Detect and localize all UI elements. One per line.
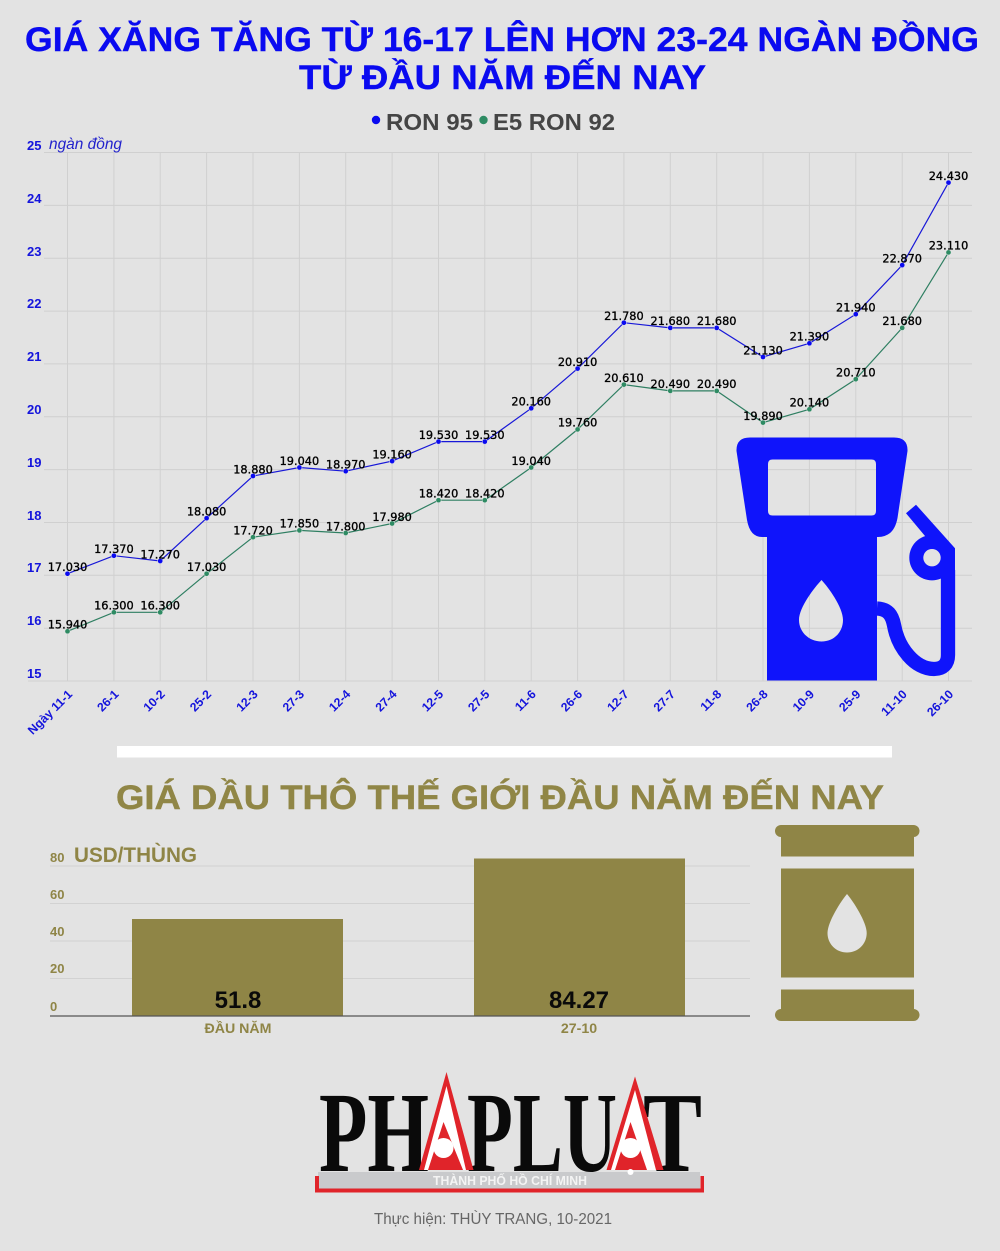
bar: start of year: ĐẦU NĂM [204, 1020, 272, 1037]
bar: start of year: 51.8 [215, 987, 261, 1014]
series: E5 RON 92: 17.030 [187, 561, 226, 574]
bar: start of year [132, 919, 343, 1037]
series: E5 RON 92: 17.800 [326, 520, 365, 533]
y axis labels [27, 138, 42, 681]
logo: Pháp Luật: THÀNH PHỐ HỒ CHÍ MINH [433, 1173, 587, 1188]
series: E5 RON 92: 23.110 [929, 240, 968, 253]
series: RON 95: 18.880 [233, 463, 273, 476]
series: RON 95: 21.940 [836, 302, 876, 314]
legend: E5 RON 92 [493, 109, 615, 135]
series: RON 95: 20.910 [558, 356, 597, 369]
series: E5 RON 92 [48, 240, 968, 634]
series: E5 RON 92: 15.940 [48, 619, 87, 632]
x axis labels: 26-10 [924, 687, 956, 719]
logo: Pháp Luật [315, 1069, 704, 1196]
x axis labels: 27-4 [373, 687, 400, 714]
logo letters: PH [319, 1069, 429, 1196]
y axis labels: 18 [27, 508, 41, 523]
logo letters: T [643, 1069, 702, 1196]
series: E5 RON 92: 20.140 [790, 397, 829, 410]
series: RON 95: 19.530 [465, 429, 505, 442]
x axis labels: 27-5 [465, 687, 493, 714]
x axis labels: 25-2 [187, 687, 214, 714]
logo letters [319, 1069, 702, 1196]
y axis labels: oil: 60 [50, 887, 64, 902]
x axis labels: 27-7 [651, 687, 678, 714]
y axis labels: 24 [27, 191, 42, 206]
bar chart: crude oil price [50, 843, 750, 1037]
x axis labels: 26-1 [94, 687, 122, 714]
y axis labels: 23 [27, 244, 41, 259]
x axis labels [25, 687, 956, 737]
series: E5 RON 92: 19.040 [511, 455, 551, 468]
x axis labels: 25-9 [836, 687, 864, 714]
y axis labels: 17 [27, 560, 41, 575]
series: E5 RON 92: 16.300 [140, 600, 180, 613]
credit: Thực hiện: THÙY TRANG, 10-2021 [374, 1211, 612, 1228]
series: RON 95: 21.680 [697, 315, 736, 328]
series: RON 95: 18.970 [326, 458, 365, 472]
series: E5 RON 92: 16.300 [94, 600, 134, 613]
line chart: fuel prices [25, 136, 972, 737]
y axis labels: oil: 20 [50, 961, 64, 976]
bar: 27-10: 27-10 [561, 1021, 597, 1037]
y axis labels: oil: 80 [50, 850, 64, 865]
white divider bar [117, 746, 892, 758]
series: E5 RON 92: 18.420 [419, 488, 458, 500]
series: RON 95: 17.270 [140, 548, 180, 561]
x axis labels: 12-5 [419, 687, 446, 714]
series: E5 RON 92: 21.680 [882, 315, 922, 328]
series: RON 95: 24.430 [929, 170, 968, 183]
y axis labels: 15 [27, 666, 41, 681]
x axis labels: Ngày 11-1 [25, 687, 75, 737]
y axis labels: 22 [27, 296, 41, 311]
x axis labels: 11-8 [698, 687, 724, 714]
x axis labels: 11-6 [512, 687, 539, 714]
x axis labels: 10-9 [790, 687, 817, 714]
title [25, 19, 979, 97]
series: E5 RON 92: 17.720 [233, 524, 273, 538]
series: RON 95: 21.780 [604, 310, 644, 323]
series: RON 95: 19.040 [280, 455, 319, 468]
title: GIÁ XĂNG TĂNG TỪ 16-17 LÊN HƠN 23-24 NGÀN ĐỒNG [25, 19, 979, 59]
series: E5 RON 92: 17.850 [280, 518, 319, 531]
y axis labels: oil: 0 [50, 999, 57, 1014]
y axis labels: 20 [27, 402, 41, 417]
title: TỪ ĐẦU NĂM ĐẾN NAY [299, 57, 706, 97]
series: RON 95: 19.530 [419, 429, 458, 442]
logo letter A with dot: Ậ [625, 1139, 647, 1172]
x axis labels: 12-7 [604, 687, 632, 714]
series: RON 95: 19.160 [372, 448, 412, 461]
y axis unit: ngàn đồng [49, 136, 122, 153]
icon: fuel pump [736, 438, 955, 680]
y axis labels: 21 [27, 349, 41, 364]
series: E5 RON 92: 18.420 [465, 488, 505, 500]
y axis labels: 25 [27, 138, 41, 153]
series: RON 95: 22.870 [882, 252, 922, 265]
unit label: USD/THÙNG [74, 843, 197, 867]
series: RON 95: 17.030 [48, 561, 87, 574]
series: RON 95: 21.390 [790, 331, 829, 344]
logo letter A with accent: Á [436, 1139, 458, 1172]
x axis labels: 26-6 [558, 687, 585, 714]
series: RON 95: 18.080 [187, 506, 226, 518]
x axis labels: 26-8 [743, 687, 771, 714]
x axis labels: 12-3 [233, 687, 261, 714]
series: E5 RON 92: 17.980 [372, 511, 412, 524]
logo letter A with dot [606, 1076, 664, 1175]
y axis labels: 19 [27, 455, 41, 470]
logo letters: PLU [467, 1069, 617, 1196]
series: RON 95 [48, 170, 968, 576]
series: RON 95: 20.160 [511, 396, 551, 409]
logo band [318, 1172, 700, 1189]
series: E5 RON 92: 19.890 [743, 410, 783, 423]
icon: oil barrel [775, 825, 920, 1021]
heading: crude oil: GIÁ DẦU THÔ THẾ GIỚI ĐẦU NĂM ĐẾN NAY [116, 777, 884, 817]
logo letter A with accent [419, 1072, 474, 1172]
legend [372, 109, 615, 135]
x axis labels: 12-4 [326, 687, 353, 714]
series: E5 RON 92: 19.760 [558, 417, 597, 430]
series: E5 RON 92: 20.610 [604, 372, 644, 385]
series: RON 95: 21.130 [743, 344, 783, 357]
y axis labels: oil [50, 850, 64, 1014]
legend: RON 95 [386, 109, 473, 135]
bar: 27-10: 84.27 [549, 987, 609, 1014]
series: E5 RON 92: 20.710 [836, 366, 876, 380]
series: RON 95: 21.680 [651, 315, 690, 328]
x axis labels: 10-2 [141, 687, 168, 714]
series: RON 95: 17.370 [94, 543, 134, 556]
series: E5 RON 92: 20.490 [697, 378, 736, 391]
y axis labels: oil: 40 [50, 924, 64, 939]
y axis labels: 16 [27, 613, 41, 628]
x axis labels: 11-10 [878, 687, 910, 719]
x axis labels: 27-3 [280, 687, 307, 714]
series: E5 RON 92: 20.490 [651, 378, 690, 391]
bar: 27-10 [474, 858, 685, 1037]
